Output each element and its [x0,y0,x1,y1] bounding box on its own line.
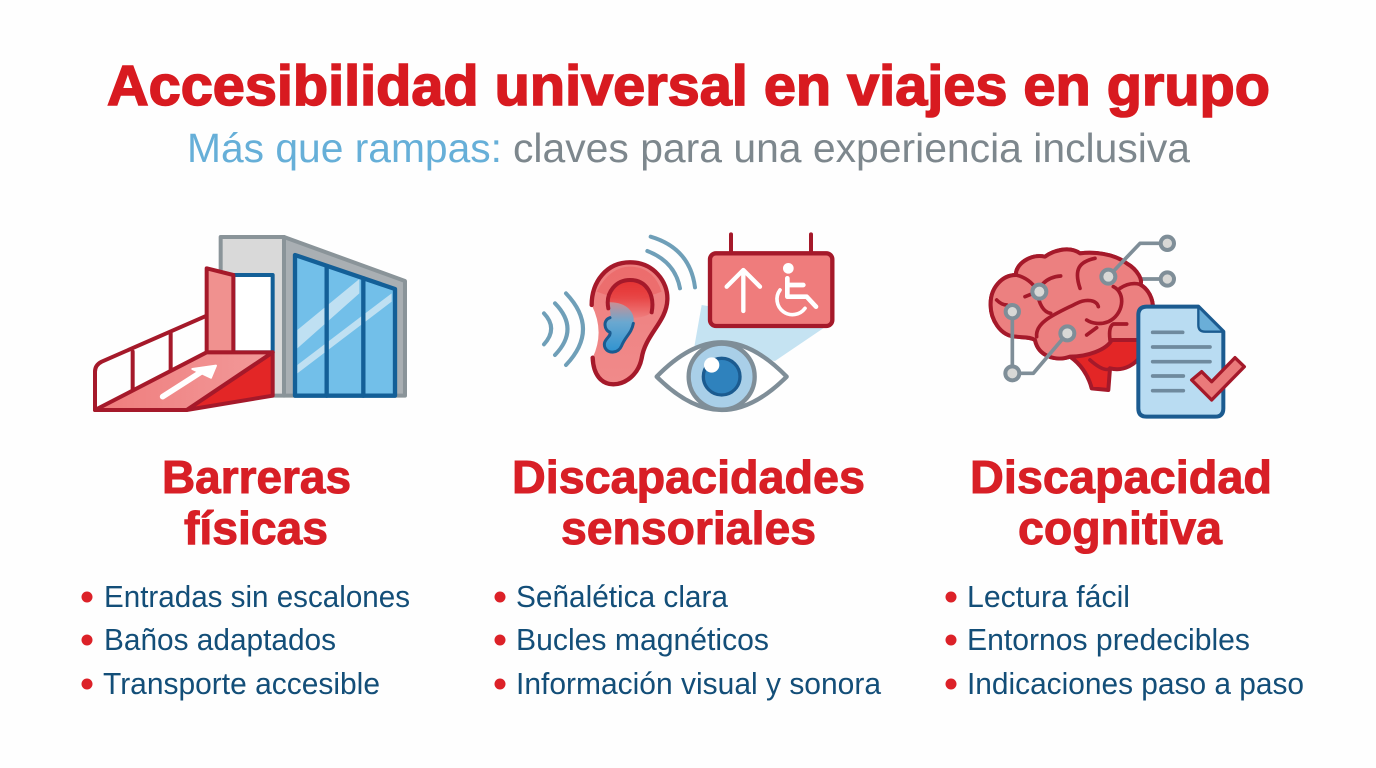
icon: document [1138,307,1223,417]
icon: neural nodes [1005,237,1174,380]
panel: barreras físicas [82,237,410,701]
heading: discapacidades sensoriales [512,451,865,554]
icon: node connector behind brain [1140,273,1167,284]
heading: discapacidad cognitiva: cognitiva [1018,502,1222,554]
icon: building with ramp [95,237,405,410]
title: Accesibilidad universal en viajes en grupo [107,54,1270,118]
panel: discapacidades sensoriales [494,234,882,701]
icon: ear [592,262,667,384]
subtitle: claves para una experiencia inclusiva [513,125,1190,171]
icon: eye [657,342,787,410]
icon: ear, eye and sign [544,234,832,410]
list: barreras físicas: Entradas sin escalones [104,579,410,614]
list: discapacidades sensoriales: Señalética clara [516,579,729,614]
icon: check mark [1192,358,1244,400]
heading: discapacidades sensoriales: Discapacidades [512,451,865,503]
list: barreras físicas: Baños adaptados [104,622,336,657]
list: discapacidad cognitiva: Indicaciones paso a paso [967,666,1304,701]
heading: discapacidad cognitiva [970,451,1272,554]
heading: barreras físicas: físicas [184,502,328,554]
heading: barreras físicas [162,451,351,554]
panel: discapacidad cognitiva [946,237,1304,701]
list: discapacidades sensoriales: Bucles magnéticos [516,622,769,657]
list: discapacidad cognitiva: Entornos predecibles [967,622,1250,657]
subtitle: Más que rampas: [187,125,502,171]
icon: vision beam [694,305,827,361]
list: discapacidad cognitiva [946,579,1304,701]
list: discapacidades sensoriales [494,579,882,701]
list: barreras físicas [82,579,410,701]
icon: sound waves [544,237,695,365]
icon: accessible sign [710,234,832,326]
list: barreras físicas: Transporte accesible [103,666,380,701]
heading: discapacidades sensoriales: sensoriales [561,502,816,554]
heading: barreras físicas: Barreras [162,451,351,503]
subtitle [187,125,1190,171]
icon: brain [991,249,1153,390]
list: discapacidad cognitiva: Lectura fácil [967,579,1130,614]
list: discapacidades sensoriales: Información visual y sonora [516,666,882,701]
icon: brain and document [991,237,1244,417]
heading: discapacidad cognitiva: Discapacidad [970,451,1272,503]
